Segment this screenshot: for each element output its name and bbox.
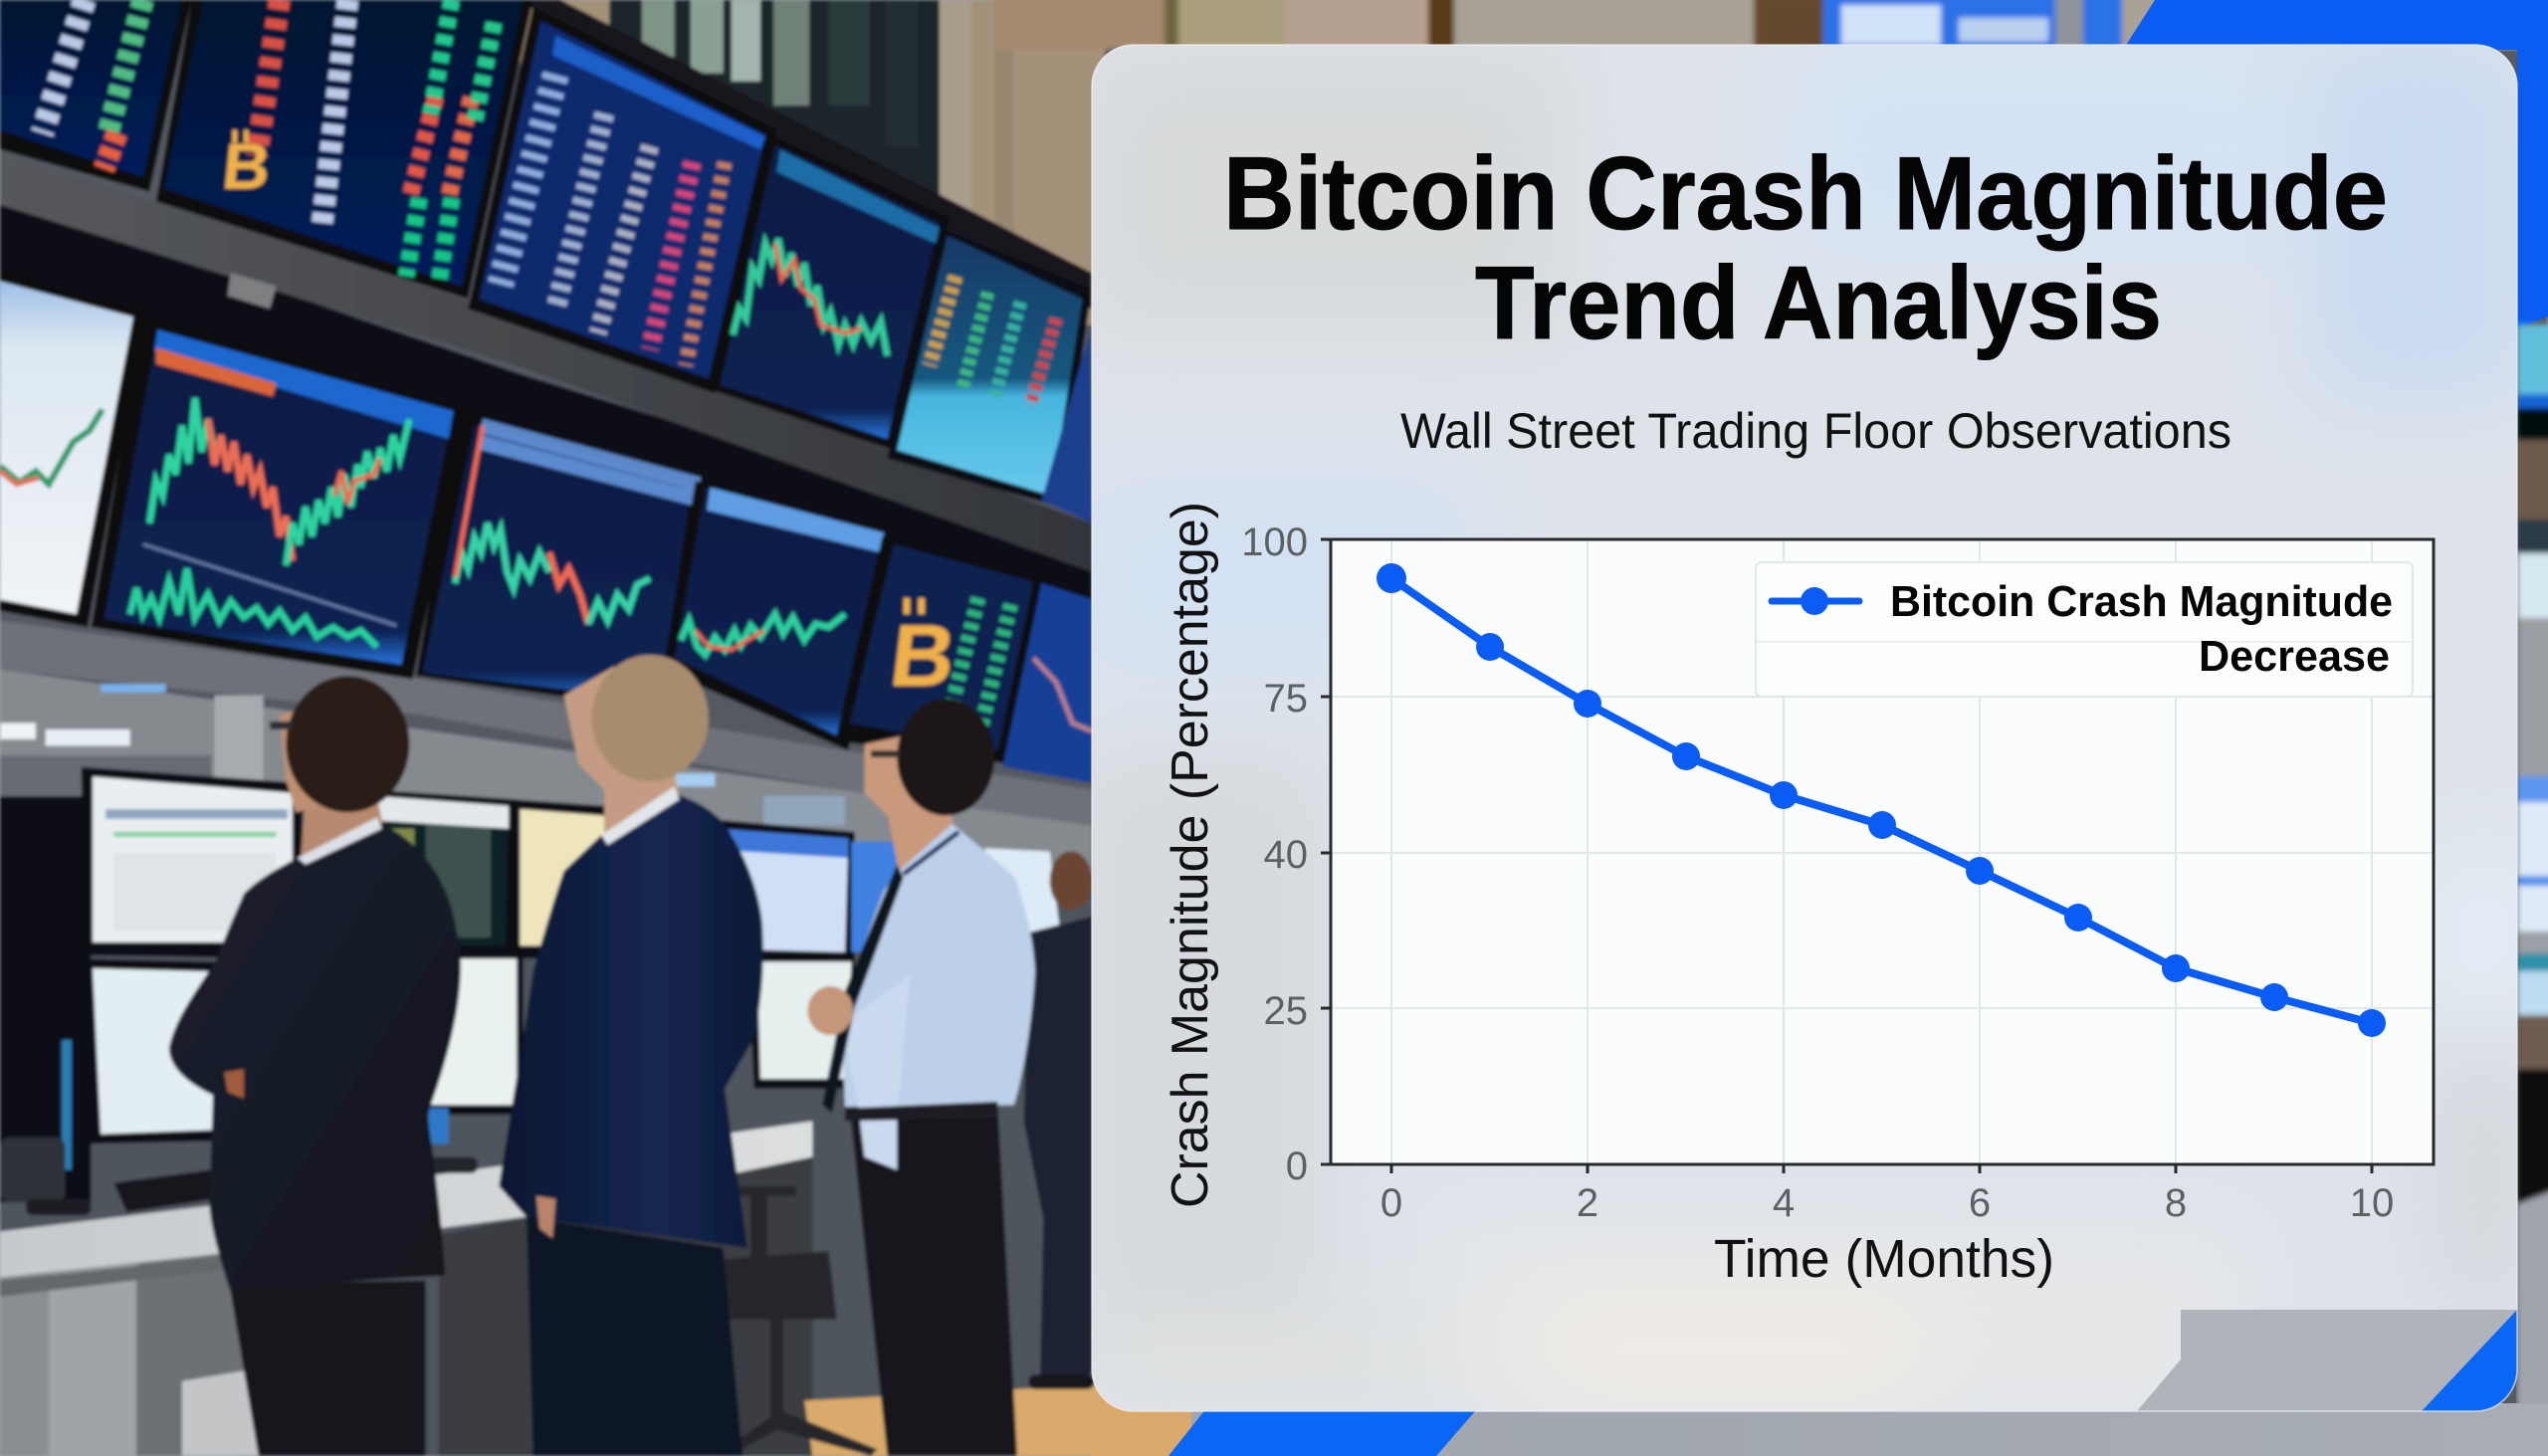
x axis tick labels: 10	[2350, 1181, 2394, 1225]
legend	[1756, 562, 2413, 697]
gridlines	[1331, 539, 2434, 1164]
subtitle: Wall Street Trading Floor Observations	[1400, 403, 2231, 459]
trader 3: light blue shirt	[807, 699, 1035, 1456]
panel: chart card	[1075, 40, 2528, 1423]
corner grey block	[2137, 1310, 2517, 1411]
y axis tick labels: 0	[1286, 1144, 1308, 1188]
icon: bitcoin symbol, upper screen: B	[219, 130, 274, 202]
x axis tick labels: 2	[1577, 1181, 1598, 1225]
data line: crash magnitude	[1377, 563, 2386, 1037]
x axis tick labels: 8	[2165, 1181, 2187, 1225]
x axis title: Time (Months)	[1714, 1229, 2054, 1289]
y axis tick labels: 75	[1264, 677, 1308, 721]
legend swatch	[1772, 587, 1859, 615]
x axis tick labels: 6	[1969, 1181, 1991, 1225]
top strip: wall behind panel	[995, 0, 2548, 50]
trader 2: navy suit	[499, 655, 763, 1456]
row 1 monitors	[0, 0, 1092, 523]
plot border and ticks	[1321, 539, 2434, 1173]
dark upper soffit	[517, 0, 1092, 309]
bottom strip	[1092, 1403, 2548, 1456]
title	[1223, 136, 2388, 361]
background trader	[1024, 852, 1094, 1389]
title: Trend Analysis	[1475, 246, 2162, 361]
y axis tick labels	[1241, 520, 1308, 1188]
wood floor	[804, 1381, 1170, 1456]
icon: bitcoin symbol, lower screen: B	[885, 606, 960, 705]
back office wall and ceiling lights	[0, 670, 1092, 1456]
panel haze tones	[1075, 40, 2528, 1423]
x axis tick labels: 4	[1773, 1181, 1795, 1225]
y axis tick labels: 25	[1264, 989, 1308, 1033]
line chart	[1162, 502, 2434, 1289]
y axis tick labels: 40	[1264, 833, 1308, 877]
lower shelf	[0, 621, 1092, 825]
upper shelf	[0, 152, 1092, 572]
right strip: blurred screens	[2517, 324, 2548, 1456]
plot area	[1331, 539, 2434, 1164]
desk and cabinets	[0, 1122, 812, 1456]
row 2 monitors	[0, 270, 1092, 783]
dark gap behind screens	[0, 195, 1092, 617]
legend label	[1890, 577, 2393, 681]
building wall and windows	[520, 0, 1105, 325]
x axis tick labels: 0	[1380, 1181, 1402, 1225]
y axis title: Crash Magnitude (Percentage)	[1162, 502, 1219, 1208]
x axis tick labels	[1380, 1181, 2394, 1225]
title: Bitcoin Crash Magnitude	[1223, 136, 2388, 252]
desk monitors	[0, 767, 1063, 1202]
corner blue wedge	[2422, 1310, 2517, 1411]
office chair	[715, 1186, 878, 1456]
legend label: Bitcoin Crash Magnitude	[1890, 577, 2393, 626]
blue corner shape, top right	[2123, 0, 2548, 328]
trader 1: dark suit	[169, 676, 461, 1456]
legend label: Decrease	[2199, 632, 2390, 681]
y axis tick labels: 100	[1241, 520, 1308, 564]
